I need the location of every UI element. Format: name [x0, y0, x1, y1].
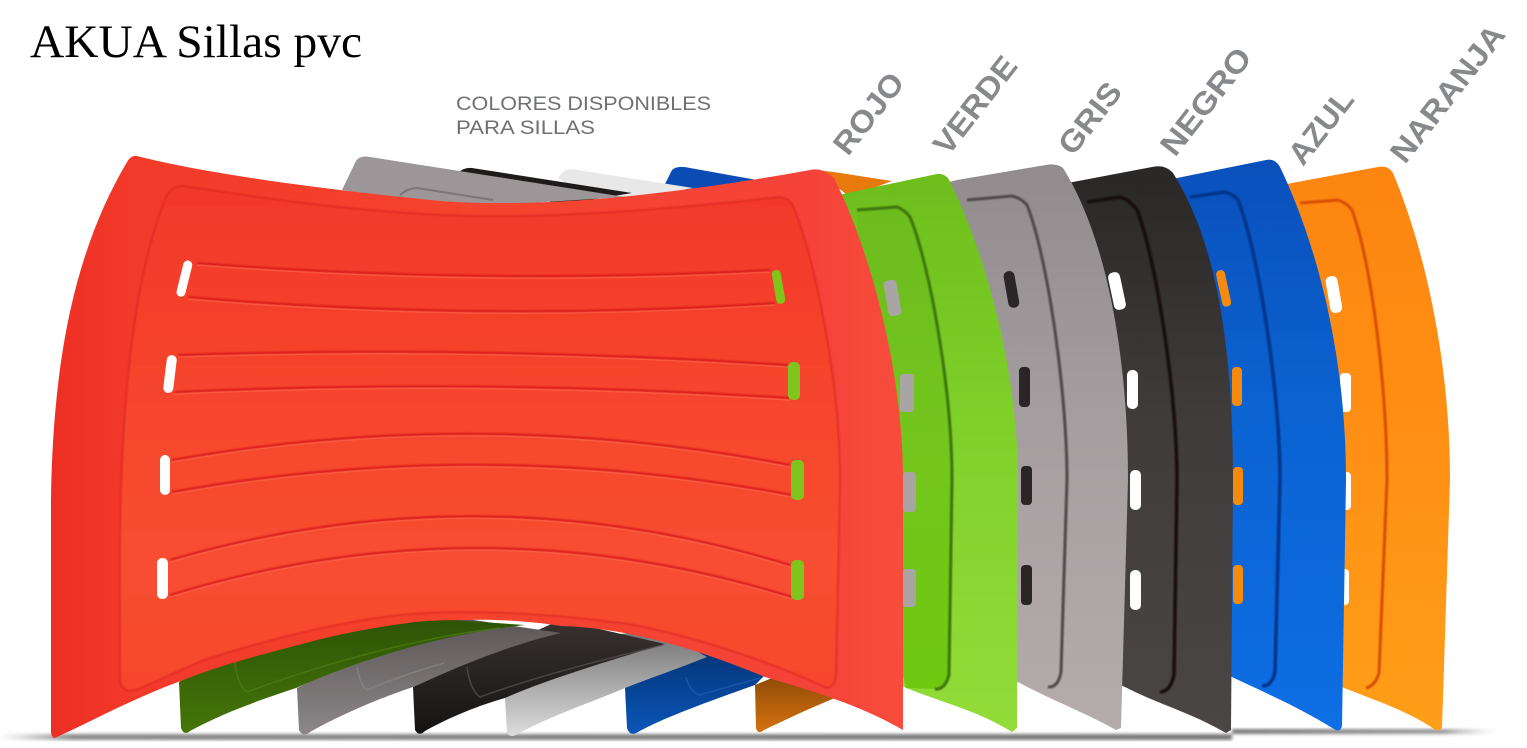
label: naranja: NARANJA [1383, 18, 1512, 169]
chair: black [413, 166, 1233, 734]
chair: green [179, 174, 1018, 733]
black slots [1107, 271, 1141, 610]
label: negro: NEGRO [1153, 41, 1259, 162]
black right panel [1010, 166, 1233, 733]
blue foot [625, 640, 775, 734]
green groove [857, 207, 952, 689]
label: rojo: ROJO [826, 66, 911, 161]
red groove highlights [170, 265, 792, 599]
red slots right [771, 269, 804, 600]
label: azul: AZUL [1281, 83, 1361, 171]
available colours caption: PARA SILLAS [456, 118, 595, 139]
title: AKUA Sillas pvc [30, 16, 362, 68]
green right panel [800, 174, 1018, 732]
blue right panel [1120, 160, 1346, 730]
available colours caption [456, 94, 711, 139]
white top edge behind red [558, 169, 693, 205]
gray foot [297, 615, 561, 735]
red seat shell [51, 156, 903, 738]
label: verde: VERDE [926, 49, 1024, 161]
black groove [1087, 197, 1177, 692]
black foot groove [467, 645, 663, 697]
chair: gray [297, 156, 1128, 735]
white foot [505, 630, 707, 736]
orange foot [755, 650, 840, 732]
white sliver along black edge [1176, 177, 1236, 480]
blue top edge behind red [665, 167, 757, 195]
gray top edge behind red [342, 156, 625, 208]
floor shadow [0, 729, 1497, 740]
green foot [179, 610, 525, 733]
chair: blue [625, 160, 1346, 734]
red inner panel [120, 186, 840, 690]
green slots [883, 279, 916, 607]
red slots left [157, 260, 193, 599]
gray top inner groove [400, 188, 493, 200]
red grooves [170, 263, 792, 597]
blue foot groove [686, 677, 760, 695]
green inner panel [857, 207, 952, 689]
gray slots [1003, 270, 1032, 605]
orange top edge behind red [815, 170, 892, 197]
colour labels [826, 18, 1512, 171]
orange groove [1300, 200, 1387, 688]
available colours caption: COLORES DISPONIBLES [456, 94, 711, 115]
chair: red (front) [51, 156, 903, 738]
gray right panel [900, 164, 1128, 730]
gray groove [967, 196, 1067, 687]
gray foot groove [357, 663, 444, 690]
black top edge behind red [458, 168, 632, 205]
orange right panel [1230, 167, 1450, 731]
orange slots [1325, 275, 1351, 605]
label: gris: GRIS [1051, 75, 1129, 161]
chair: white [505, 169, 707, 736]
blue groove [1190, 192, 1280, 686]
chair: orange [755, 167, 1450, 732]
black foot [413, 620, 665, 734]
green foot groove [235, 628, 500, 692]
blue slots [1215, 269, 1243, 604]
